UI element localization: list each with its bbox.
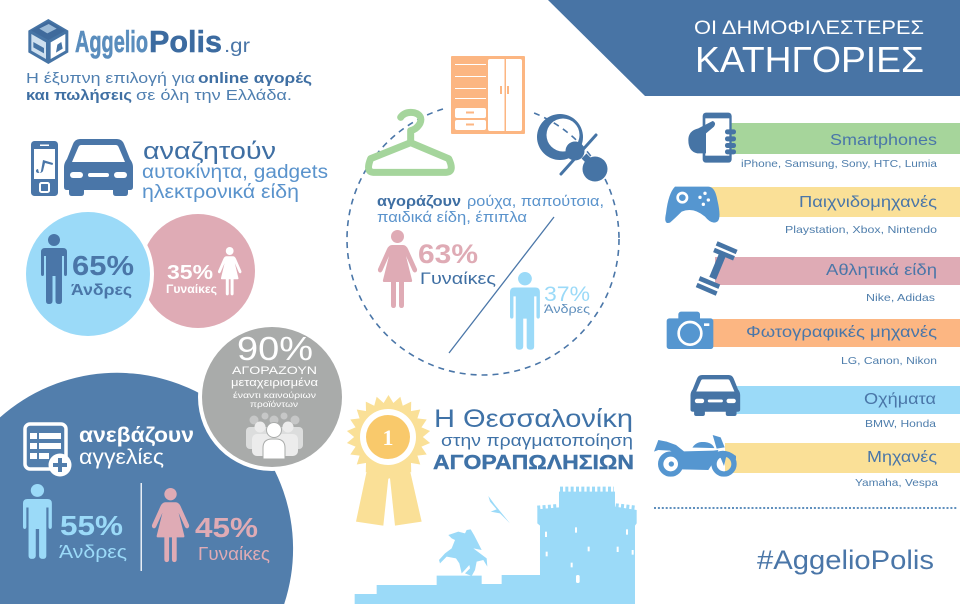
icon: seagull	[488, 496, 510, 523]
panel: women searchers: 35%	[167, 262, 213, 284]
icon: hanger	[369, 112, 451, 172]
icon: wardrobe	[446, 52, 530, 140]
panel: women searchers: Γυναίκες	[166, 282, 217, 296]
search heading: ηλεκτρονικά είδη	[142, 182, 299, 203]
men listing stat: 55%	[60, 510, 123, 541]
icon: motorcycle	[654, 435, 736, 474]
Thessaloniki heading	[433, 405, 634, 474]
panel: 90 percent second hand: έναντι καινούριων	[233, 390, 316, 400]
icon: rosette: 1	[382, 425, 394, 450]
category: vehicles: BMW, Honda	[865, 418, 936, 430]
icon: car	[64, 139, 133, 196]
hashtag: #AggelioPolis	[757, 545, 934, 575]
header title line one: ΟΙ ΔΗΜΟΦΙΛΕΣΤΕΡΕΣ	[694, 17, 924, 39]
icon: equestrian statue	[439, 529, 487, 576]
header banner	[548, 0, 960, 96]
dashed circle	[347, 103, 619, 375]
logo wordmark	[75, 24, 251, 59]
category: sports: Αθλητικά είδη	[826, 262, 937, 279]
category: motorcycles	[654, 435, 960, 489]
tagline: online αγορές	[198, 70, 312, 87]
icon: car small	[690, 375, 740, 416]
women listing stat: Γυναίκες	[198, 544, 270, 564]
women buyers stat: 63%	[418, 239, 478, 269]
category: sports: Nike, Adidas	[866, 292, 935, 304]
category: smartphones: Smartphones	[830, 132, 937, 149]
buying heading: παιδικά είδη, έπιπλα	[377, 210, 527, 226]
listings heading	[79, 424, 194, 469]
category: smartphones	[688, 113, 960, 170]
category: consoles: Playstation, Xbox, Nintendo	[785, 224, 937, 236]
listings heading: ανεβάζουν	[79, 424, 194, 447]
logo wordmark: .gr	[224, 36, 251, 57]
icon: dumbbell	[697, 243, 737, 294]
icon: hand holding phone	[688, 113, 736, 163]
icon: add listing form	[25, 424, 72, 476]
buying heading	[377, 194, 604, 226]
icon: music phone	[31, 141, 58, 196]
search heading	[142, 138, 328, 203]
women listing stat	[152, 488, 270, 564]
category: cameras: Φωτογραφικές μηχανές	[746, 324, 937, 341]
panel: 90 percent second hand	[198, 323, 346, 471]
buying heading: αγοράζουν	[377, 194, 461, 210]
category: consoles: Παιχνιδομηχανές	[799, 194, 937, 211]
women buyers stat: Γυναίκες	[420, 269, 496, 288]
Thessaloniki heading: ΑΓΟΡΑΠΩΛΗΣΙΩΝ	[433, 452, 634, 474]
icon: pacifier	[537, 114, 608, 182]
category: motorcycles: Yamaha, Vespa	[855, 477, 938, 489]
men listing stat	[23, 484, 127, 562]
search heading: αυτοκίνητα, gadgets	[142, 162, 328, 183]
category: vehicles: Οχήματα	[864, 391, 936, 408]
Thessaloniki heading: στην πραγματοποίηση	[441, 431, 633, 450]
panel: 90 percent second hand: 90%	[237, 330, 313, 367]
icon: game controller	[665, 187, 719, 223]
logo	[28, 19, 251, 64]
panel: women searchers	[141, 214, 255, 328]
header title line two: ΚΑΤΗΓΟΡΙΕΣ	[695, 39, 924, 80]
panel: men searchers	[22, 208, 154, 340]
category: cameras: LG, Canon, Nikon	[841, 355, 937, 367]
category: sports	[697, 243, 960, 304]
skyline illustration	[355, 489, 637, 604]
panel: men searchers: Άνδρες	[71, 282, 132, 299]
tagline	[26, 70, 312, 104]
category: smartphones: iPhone, Samsung, Sony, HTC, Lumia	[741, 158, 937, 170]
icon: camera	[667, 312, 713, 349]
icon: white tower and steps	[355, 489, 637, 604]
icon: logo box	[28, 19, 68, 64]
men buyers stat: Άνδρες	[544, 302, 590, 316]
category: motorcycles: Μηχανές	[867, 449, 937, 466]
panel: 90 percent second hand: μεταχειρισμένα	[231, 377, 319, 389]
men listing stat: Άνδρες	[59, 542, 127, 562]
Thessaloniki heading: Η Θεσσαλονίκη	[434, 405, 633, 433]
buying heading: ρούχα, παπούτσια,	[467, 194, 604, 210]
men buyers stat	[510, 272, 590, 350]
tagline: σε όλη την Ελλάδα.	[136, 87, 292, 104]
women listing stat: 45%	[195, 512, 258, 543]
women buyers stat	[378, 230, 496, 308]
panel: men searchers: 65%	[72, 250, 134, 281]
category: cameras	[667, 312, 960, 367]
men buyers stat: 37%	[544, 283, 590, 306]
logo wordmark: Aggelio	[75, 24, 148, 59]
tagline: και πωλήσεις	[26, 87, 132, 104]
category: vehicles	[690, 375, 960, 430]
logo wordmark: Polis	[149, 24, 222, 59]
panel: upload listings circle	[0, 373, 293, 604]
panel: 90 percent second hand: ΑΓΟΡΑΖΟΥΝ	[232, 365, 317, 377]
icon: crowd	[246, 412, 303, 459]
listings heading: αγγελίες	[79, 446, 164, 469]
panel: 90 percent second hand: προϊόντων	[250, 399, 298, 409]
icon: rosette	[346, 395, 431, 526]
search heading: αναζητούν	[143, 138, 276, 165]
tagline: Η έξυπνη επιλογή για	[26, 70, 195, 87]
category: consoles	[665, 187, 960, 236]
